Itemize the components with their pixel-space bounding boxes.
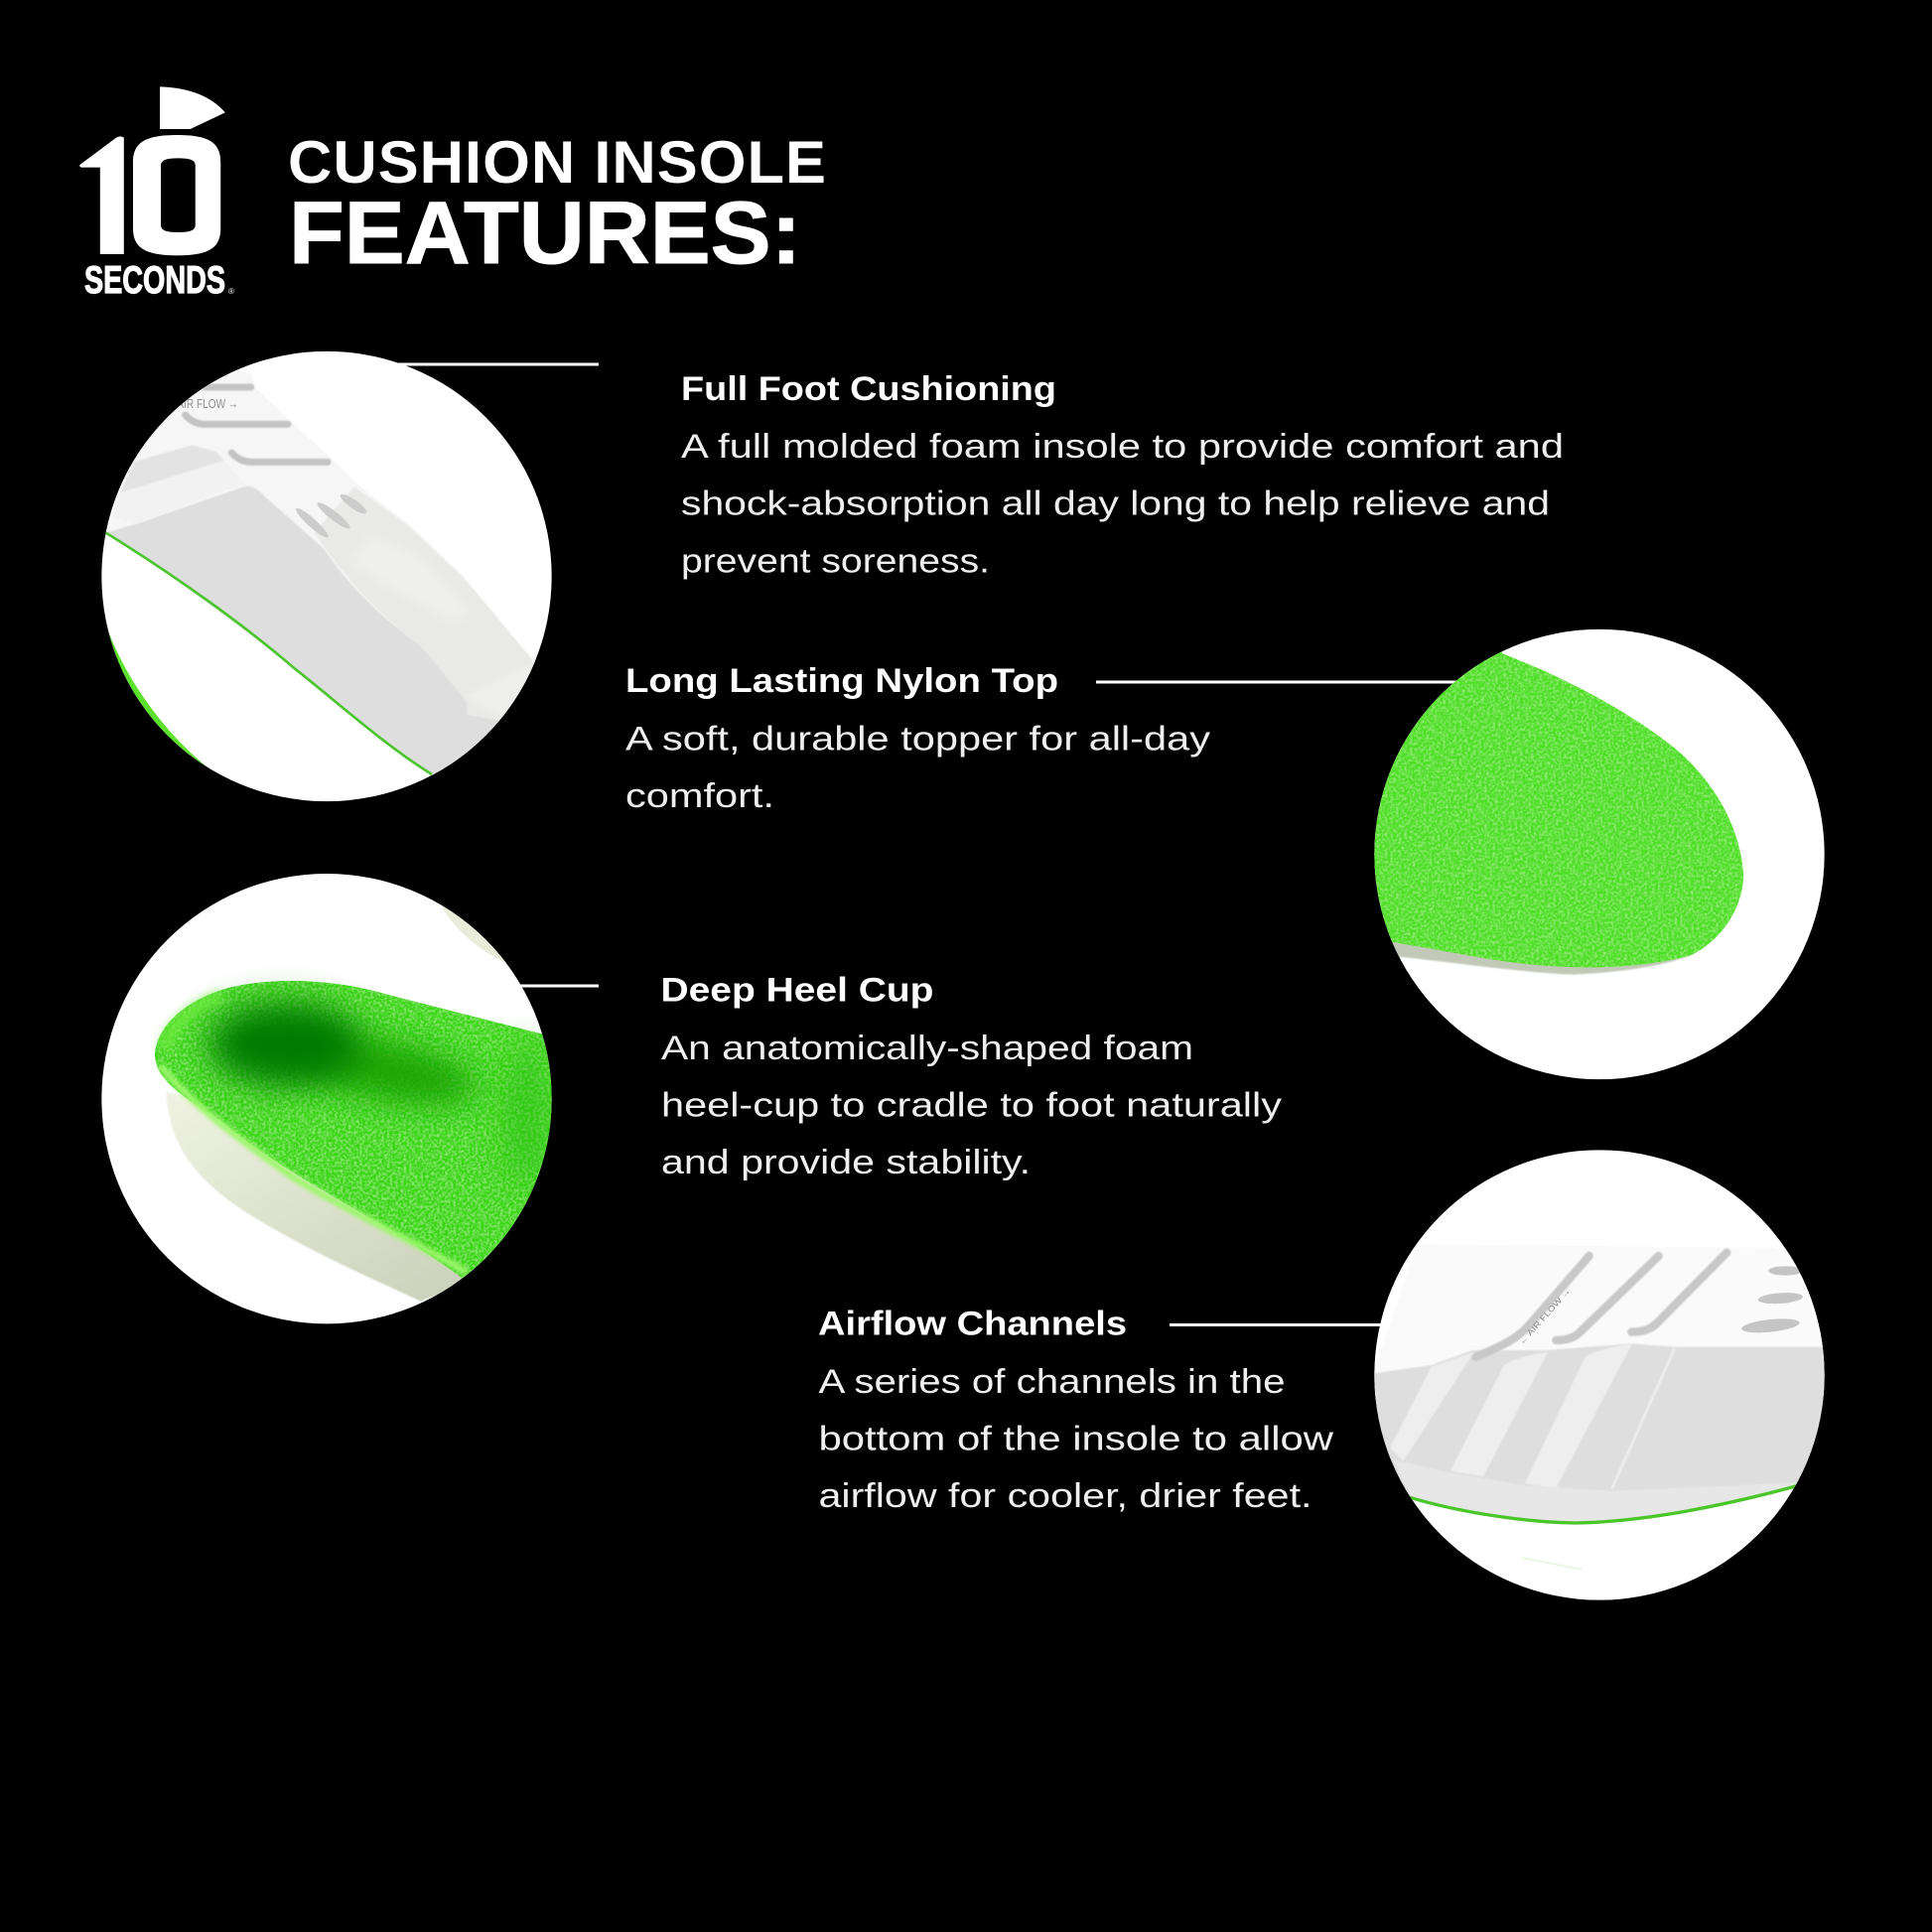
raised ridges [1390, 1343, 1632, 1489]
description: and provide stability. [661, 1144, 1031, 1181]
green foam edge [1410, 1486, 1797, 1523]
photo circle: full foot cushioning [89, 351, 586, 801]
connector line: full foot cushioning [392, 363, 599, 365]
bottom skirt [1393, 1459, 1797, 1523]
description [661, 1030, 1283, 1181]
green sliver [107, 629, 207, 767]
side wall [1374, 1343, 1825, 1497]
description: A full molded foam insole to provide comfort and [681, 428, 1564, 466]
tread strip [117, 461, 223, 501]
feature text: full foot cushioning [681, 370, 1564, 580]
description: heel-cup to cradle to foot naturally [661, 1086, 1283, 1124]
photo circle: airflow channels [1373, 1150, 1830, 1600]
embossed lettering: AIR FLOW → [177, 396, 238, 411]
title [288, 129, 827, 282]
green top-edge line [106, 533, 432, 774]
description: An anatomically-shaped foam [661, 1030, 1193, 1067]
connector line: long lasting nylon top [1096, 681, 1463, 683]
foam side wall [166, 1092, 519, 1302]
insole bottom plane [1373, 1244, 1830, 1373]
cup shadow tail [278, 1021, 483, 1117]
description: shock-absorption all day long to help relieve and [681, 484, 1550, 522]
feature text: deep heel cup [661, 971, 1283, 1181]
connector line: airflow channels [1170, 1323, 1383, 1326]
photo circle: long lasting nylon top [1360, 616, 1825, 1079]
heading: Long Lasting Nylon Top [625, 662, 1058, 700]
clipped shading group [161, 996, 549, 1273]
logo registered mark: ® [228, 287, 234, 296]
green nylon topper [1374, 651, 1743, 967]
heading: Airflow Channels [818, 1306, 1127, 1343]
description: bottom of the insole to allow [818, 1420, 1333, 1457]
right shading [503, 1042, 549, 1188]
vent holes [1740, 1266, 1803, 1335]
feature text: airflow channels [818, 1306, 1333, 1515]
cup shadow [208, 1003, 360, 1085]
lit left rim [164, 996, 221, 1049]
connector line: deep heel cup [516, 985, 599, 987]
feature text: long lasting nylon top [625, 662, 1211, 815]
faint reflection [1522, 1558, 1582, 1570]
title line 1: CUSHION INSOLE [288, 129, 827, 196]
description: prevent soreness. [681, 542, 990, 580]
heel band [502, 666, 533, 717]
side wall [107, 486, 499, 774]
logo flag mark [160, 86, 225, 129]
panel edge [1611, 1348, 1675, 1489]
green heel cup [155, 981, 569, 1279]
title line 2: FEATURES: [289, 183, 801, 282]
channel ridges [186, 387, 328, 462]
embossed lettering: ← AIR FLOW → [1517, 1287, 1573, 1346]
logo numeral 10 [79, 135, 220, 255]
description [625, 721, 1211, 815]
raised tread [121, 445, 224, 492]
lit lower rim [161, 1065, 467, 1273]
description: airflow for cooler, drier feet. [818, 1477, 1312, 1515]
mottled highlight [350, 536, 470, 622]
description: A series of channels in the [818, 1363, 1285, 1401]
insole body [105, 370, 534, 774]
heading: Deep Heel Cup [661, 971, 933, 1009]
brand logo: 10 Seconds [79, 86, 234, 302]
description: comfort. [625, 777, 774, 815]
description [818, 1363, 1333, 1515]
photo circle: deep heel cup [101, 874, 569, 1323]
channels [1476, 1253, 1726, 1357]
second insole sliver [443, 907, 506, 963]
description [681, 428, 1564, 580]
vent holes [296, 494, 367, 538]
foam edge under topper [1390, 941, 1698, 975]
heading: Full Foot Cushioning [681, 370, 1056, 408]
logo wordmark: SECONDS [84, 259, 225, 302]
description: A soft, durable topper for all-day [625, 721, 1211, 759]
upper side band [316, 487, 534, 723]
